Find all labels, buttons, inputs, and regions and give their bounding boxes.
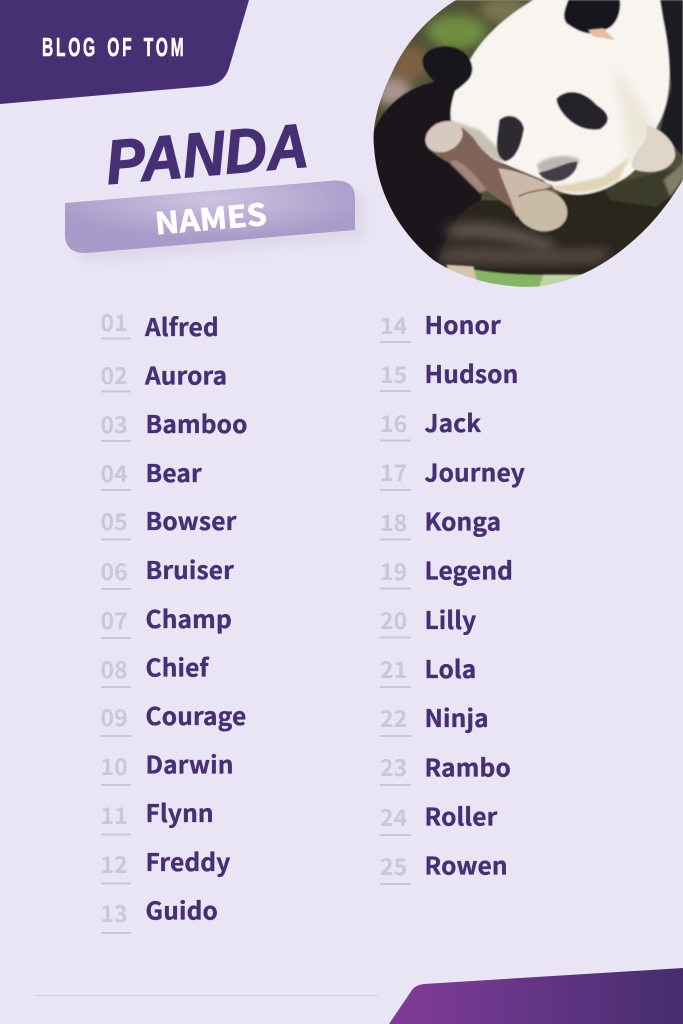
row 07: Champ (146, 601, 232, 636)
row 13: 13 (100, 895, 128, 929)
row 04: 04 (100, 455, 128, 489)
left ear (422, 46, 472, 95)
row 10: 10 (100, 748, 128, 782)
row 15 (380, 356, 518, 391)
row 07 (100, 601, 232, 638)
row 10: Darwin (146, 746, 234, 782)
row 21 (380, 651, 476, 687)
row 06: Bruiser (146, 552, 234, 587)
row 08: Chief (146, 650, 209, 684)
top ear (564, 0, 620, 33)
row 25 (380, 848, 508, 884)
row 03: 03 (100, 406, 128, 440)
row 09 (100, 698, 246, 736)
row 06: 06 (100, 553, 128, 587)
row 23 (380, 749, 511, 785)
subtitle banner (65, 180, 365, 263)
footer corner shape (389, 968, 683, 1024)
banner shadow (75, 191, 365, 263)
brand name: BLOG OF TOM (42, 33, 186, 62)
row 25: 25 (380, 848, 407, 882)
head (451, 0, 669, 195)
row 12: 12 (100, 846, 128, 880)
header badge (0, 0, 249, 104)
trunk (438, 190, 674, 275)
right ear (632, 125, 675, 172)
row 01: 01 (100, 304, 128, 338)
row 24: 24 (380, 799, 407, 833)
row 15: Hudson (424, 356, 518, 391)
row 24 (380, 798, 498, 835)
row 12: Freddy (146, 844, 230, 879)
row 19 (380, 552, 513, 588)
row 16: Jack (424, 405, 481, 440)
photo background (374, 0, 683, 202)
row 22: 22 (380, 700, 407, 734)
row 19: Legend (424, 552, 513, 588)
row 01 (100, 304, 219, 344)
row 13 (100, 892, 218, 933)
row 08 (100, 650, 209, 687)
branch cut ends (424, 120, 464, 154)
row 02 (100, 357, 227, 392)
row 11: 11 (100, 797, 128, 831)
row 18 (380, 504, 501, 540)
row 14: 14 (380, 307, 407, 341)
row 21: Lola (424, 651, 476, 686)
row 02: Aurora (144, 358, 227, 392)
row 24: Roller (424, 798, 498, 834)
row 09: 09 (100, 699, 128, 733)
row 07: 07 (100, 602, 128, 636)
row 13: Guido (146, 892, 218, 928)
row 03: Bamboo (146, 406, 248, 441)
branch (426, 122, 567, 232)
row 20 (380, 602, 476, 638)
subtitle: NAMES: NAMES (153, 190, 268, 243)
badge shape (0, 0, 249, 104)
row 12 (100, 844, 230, 884)
foliage at bottom (474, 268, 544, 287)
row 22 (380, 700, 489, 736)
row 09: Courage (146, 698, 246, 733)
row 17: Journey (424, 454, 525, 490)
row 18: 18 (380, 504, 407, 538)
nose (539, 162, 577, 182)
row 04: Bear (146, 455, 202, 490)
panda body (370, 80, 483, 267)
row 11 (100, 795, 214, 834)
row 25: Rowen (424, 848, 508, 882)
panda photo (370, 0, 683, 295)
row 05: Bowser (146, 503, 237, 538)
title: PANDA: PANDA (103, 112, 311, 198)
row 17 (380, 454, 525, 490)
row 17: 17 (380, 454, 407, 488)
row 23: 23 (380, 749, 407, 783)
row 23: Rambo (424, 750, 511, 784)
row 14 (380, 307, 501, 342)
row 05: 05 (100, 503, 128, 537)
right black shoulder (660, 0, 683, 157)
row 11: Flynn (146, 795, 214, 830)
eye patches (557, 92, 608, 130)
banner shape (65, 180, 355, 253)
row 20: 20 (380, 602, 407, 636)
row 03 (100, 406, 248, 441)
row 06 (100, 552, 234, 589)
row 20: Lilly (424, 602, 476, 637)
row 22: Ninja (424, 700, 489, 735)
row 14: Honor (424, 307, 501, 342)
row 18: Konga (424, 504, 501, 538)
row 08: 08 (100, 651, 128, 685)
row 02: 02 (100, 357, 128, 391)
right name column (380, 307, 525, 884)
row 05 (100, 503, 237, 540)
row 10 (100, 746, 234, 785)
row 21: 21 (380, 651, 407, 685)
row 15: 15 (380, 356, 407, 390)
row 19: 19 (380, 553, 407, 587)
row 16 (380, 405, 481, 440)
row 01: Alfred (144, 309, 219, 344)
row 04 (100, 455, 202, 490)
row 16: 16 (380, 405, 407, 439)
left name column (100, 304, 248, 933)
